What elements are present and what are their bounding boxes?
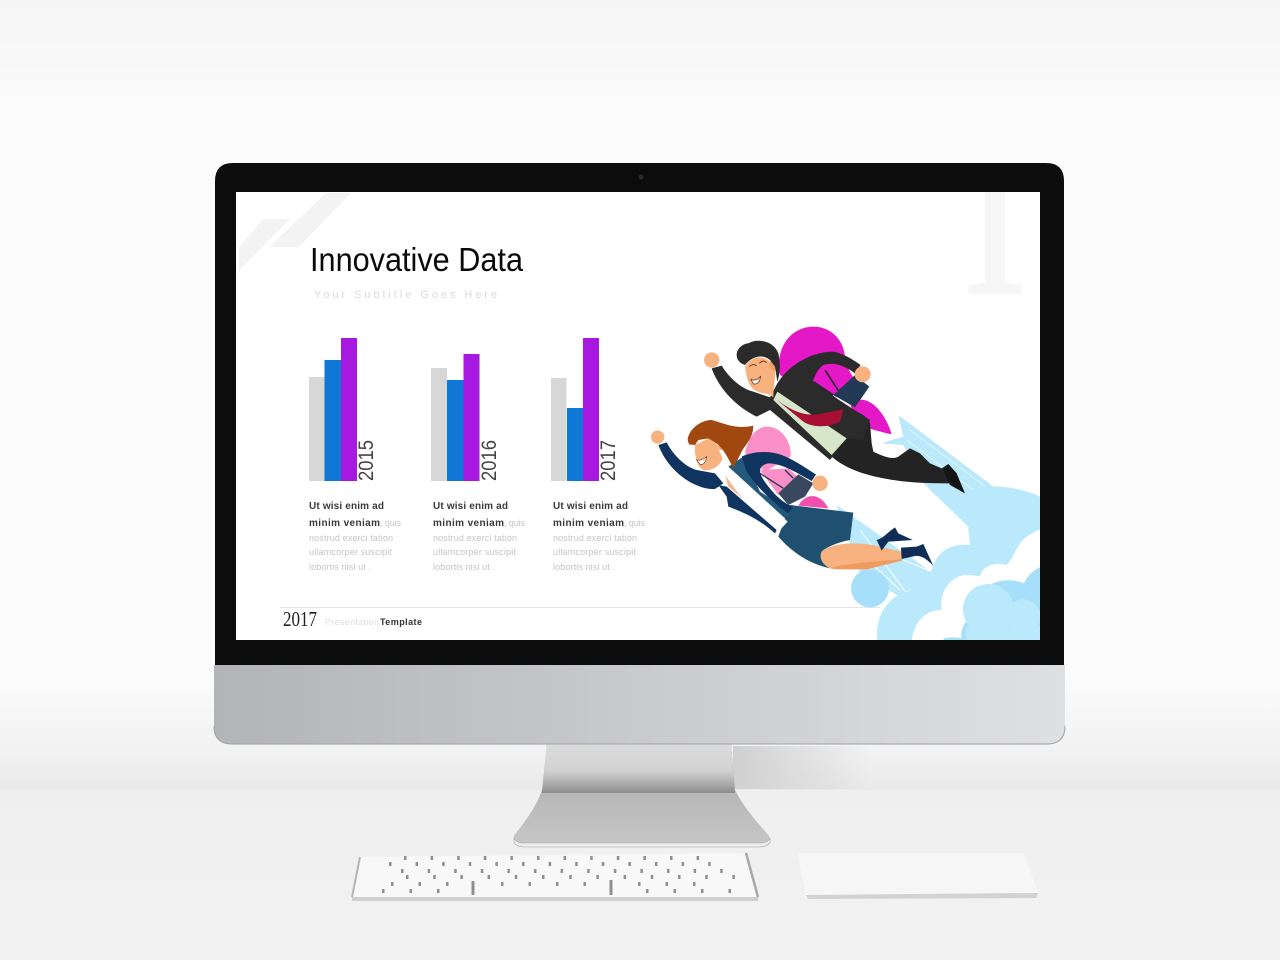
man shirt: [773, 392, 847, 455]
bar chart 2016: 2016: [478, 440, 501, 481]
trackpad: [797, 853, 1038, 899]
woman shoes: [877, 527, 913, 551]
text block 2015: [309, 501, 402, 572]
man back fill: [812, 382, 837, 398]
monitor stand: [514, 744, 770, 847]
text block 2017: lobortis nisl ut .: [553, 562, 615, 572]
text block 2017: minim veniam: [553, 518, 624, 529]
text block 2017: [553, 501, 646, 572]
woman pink panel: [760, 468, 797, 495]
footer label: Template: [380, 617, 422, 627]
text block 2016: lobortis nisl ut .: [433, 562, 495, 572]
text block 2017: nostrud exerci tation: [553, 533, 637, 543]
woman hair: [688, 420, 753, 468]
man trousers: [832, 412, 957, 483]
chin edge: [214, 726, 1065, 744]
decorative corner stripes: [239, 193, 351, 270]
woman shirt: [720, 464, 788, 531]
text block 2017: Ut wisi enim ad: [553, 501, 628, 512]
bar chart 2015: [309, 338, 378, 481]
bar chart 2015: 2015: [355, 440, 378, 481]
bar chart 2017: [551, 338, 620, 481]
man jacket: [712, 352, 870, 460]
text block 2015: lobortis nisl ut .: [309, 562, 371, 572]
woman: businesswoman flying: [651, 420, 933, 569]
woman other arm: [742, 452, 816, 513]
man briefcase: [833, 375, 869, 407]
text block 2016: nostrud exerci tation: [433, 533, 517, 543]
camera: [638, 174, 644, 180]
watermark numeral: 1: [957, 109, 1029, 339]
monitor chin: [214, 665, 1065, 744]
woman hands: [651, 430, 664, 444]
text block 2016: , quis: [504, 518, 526, 528]
woman briefcase: [778, 474, 813, 505]
monitor bezel: [215, 163, 1064, 665]
man hair: [737, 341, 780, 382]
man jetpack straps: [833, 365, 841, 398]
woman legs: [820, 543, 902, 568]
woman jetpack: [745, 427, 828, 508]
man: businessman flying: [704, 327, 965, 493]
man fists: [704, 352, 719, 368]
clouds and jet trails: [837, 415, 1041, 641]
slide screen: [236, 192, 1040, 640]
man necktie: [775, 398, 843, 426]
woman torso: [728, 457, 792, 518]
text block 2016: [433, 501, 526, 572]
subtitle: Your Subtitle Goes Here: [314, 289, 497, 301]
woman face: [695, 438, 722, 470]
text block 2016: Ut wisi enim ad: [433, 501, 508, 512]
man shoe: [943, 464, 965, 493]
footer year: 2017: [283, 607, 317, 631]
text block 2016: minim veniam: [433, 518, 504, 529]
shadow behind stand: [733, 746, 873, 789]
text block 2015: nostrud exerci tation: [309, 533, 393, 543]
text block 2015: Ut wisi enim ad: [309, 501, 384, 512]
bar chart 2016: [431, 354, 501, 481]
footer rule: [280, 607, 880, 608]
title: Innovative Data: [310, 241, 524, 278]
text block 2017: , quis: [624, 518, 646, 528]
text block 2016: ullamcorper suscipit: [433, 547, 516, 557]
woman skirt: [778, 505, 853, 568]
text block 2017: ullamcorper suscipit: [553, 547, 636, 557]
illustration: rocket businesspeople: [651, 327, 1041, 641]
desk surface: [0, 790, 1280, 960]
text block 2015: minim veniam: [309, 518, 380, 529]
woman raised arm: [658, 442, 723, 489]
footer label: [326, 618, 422, 627]
man jetpack: [779, 327, 892, 434]
woman lapel: [718, 485, 777, 533]
man neck and face: [745, 357, 775, 397]
monitor: [214, 109, 1065, 744]
keyboard: [352, 853, 758, 901]
bar chart 2017: 2017: [597, 440, 620, 481]
text block 2015: , quis: [380, 518, 402, 528]
footer label: Presentation: [325, 617, 379, 627]
text block 2015: ullamcorper suscipit: [309, 547, 392, 557]
